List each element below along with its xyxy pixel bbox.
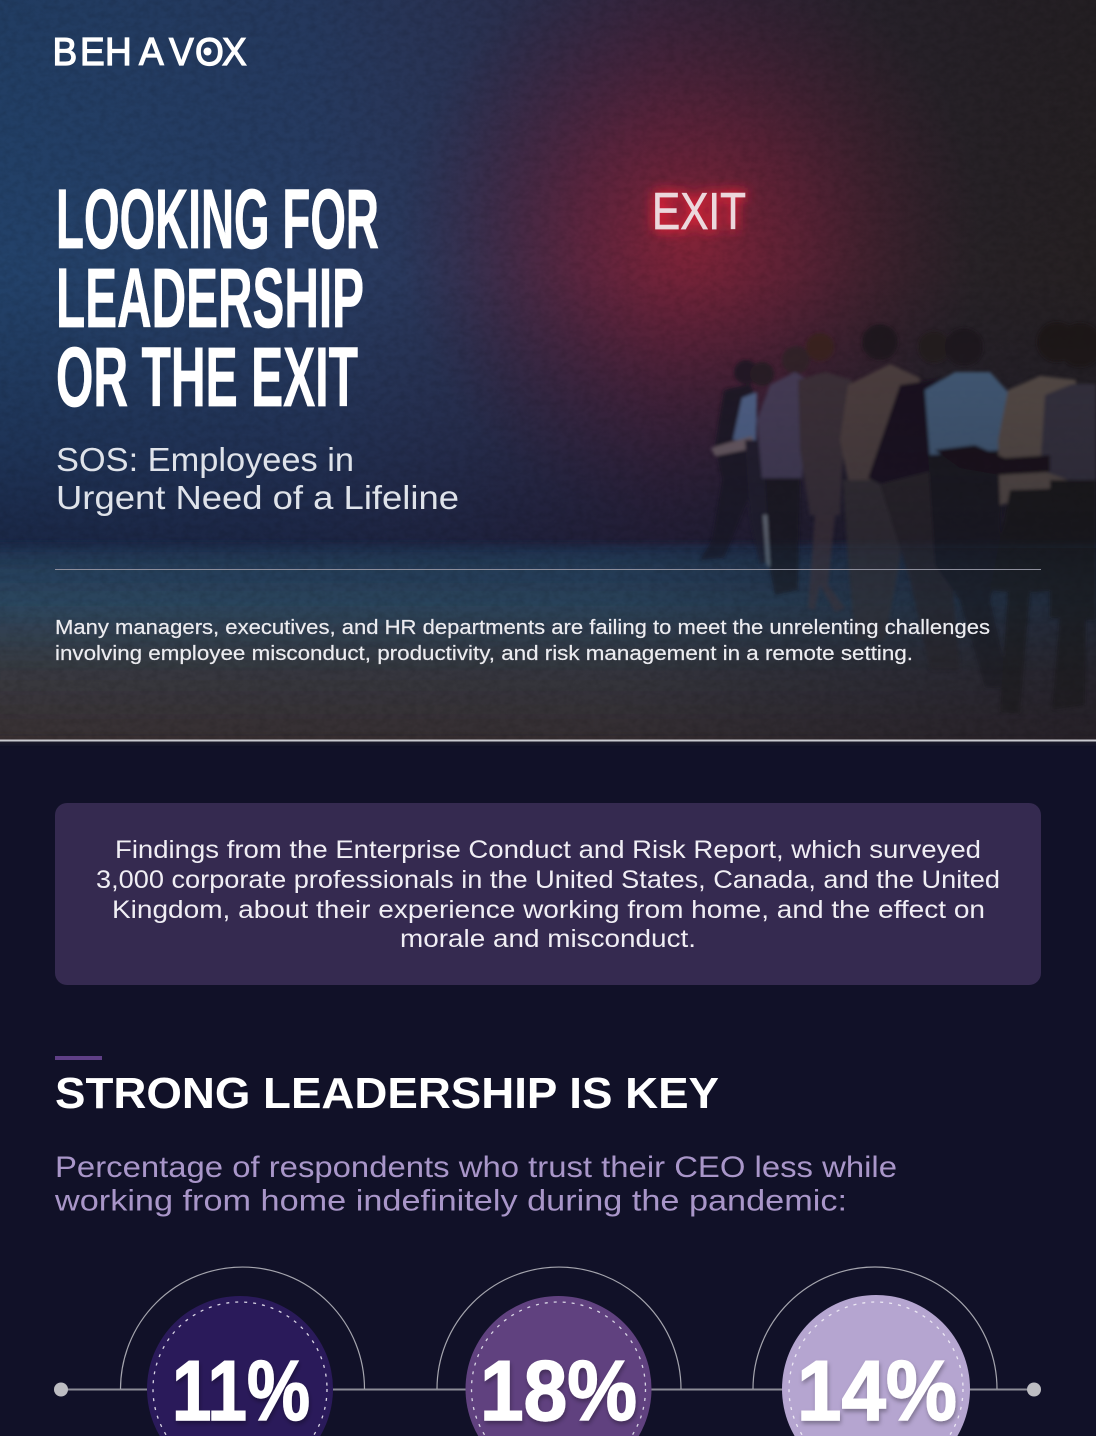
- stat: 18%: [437, 1267, 681, 1436]
- people queue: [700, 322, 1096, 714]
- person 8: [990, 322, 1077, 714]
- person 6: [868, 331, 960, 670]
- logo: BEHAVOX: [53, 31, 247, 74]
- subtitle: Urgent Need of a Lifeline: [56, 479, 459, 516]
- title: OR THE EXIT: [56, 330, 358, 424]
- exit sign: EXIT: [652, 183, 746, 241]
- subtitle: [56, 441, 459, 516]
- subheading: [54, 1151, 897, 1218]
- title: [56, 172, 379, 424]
- person 7: [925, 328, 1010, 688]
- title: LEADERSHIP: [56, 251, 364, 345]
- panel: report findings: 3,000 corporate professionals in the United States, Canada, and the United: [96, 866, 1000, 894]
- stat: 11%: [120, 1267, 364, 1436]
- heading: STRONG LEADERSHIP IS KEY: [55, 1069, 719, 1118]
- timeline connector: [54, 1382, 1041, 1396]
- panel: report findings: Findings from the Enterprise Conduct and Risk Report, which surveyed: [115, 836, 981, 864]
- title: LOOKING FOR: [56, 172, 379, 266]
- person 9: [935, 323, 1096, 710]
- exit sign: EXIT: [652, 183, 746, 241]
- person 3: [757, 346, 810, 595]
- panel: report findings: morale and misconduct.: [400, 925, 696, 953]
- intro text: [55, 617, 990, 665]
- subheading: Percentage of respondents who trust their CEO less while: [55, 1151, 897, 1184]
- subheading: working from home indefinitely during the pandemic:: [54, 1184, 847, 1218]
- person 5: [840, 324, 920, 640]
- person 4: [798, 333, 852, 612]
- intro text: Many managers, executives, and HR departments are failing to meet the unrelenting challenges: [55, 617, 990, 639]
- person 2: [711, 362, 778, 566]
- stat: 14%: [753, 1267, 997, 1436]
- hero photo: exit wall and people: [0, 0, 1096, 740]
- person 1: [700, 360, 758, 560]
- intro text: involving employee misconduct, productivity, and risk management in a remote setting.: [55, 643, 913, 665]
- panel: report findings: [55, 803, 1041, 985]
- subtitle: SOS: Employees in: [56, 441, 354, 478]
- panel: report findings: Kingdom, about their experience working from home, and the effect on: [112, 896, 985, 924]
